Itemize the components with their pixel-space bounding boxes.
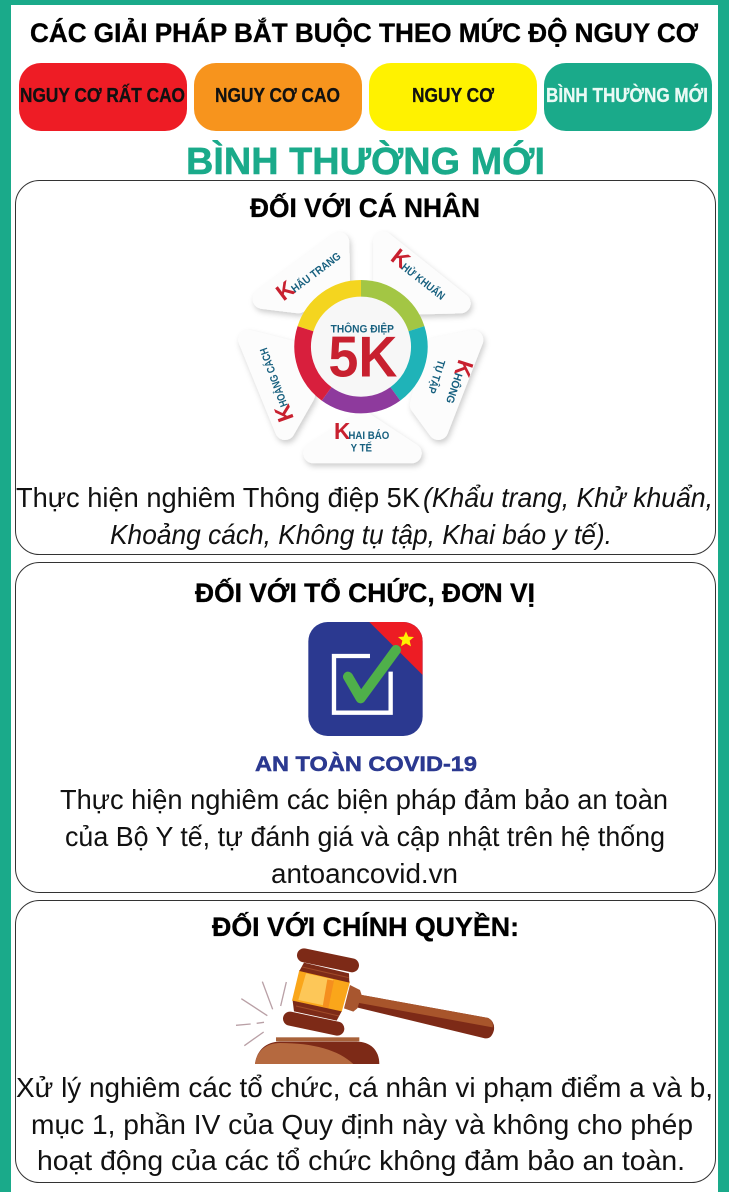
label: Khoảng cách: HOẢNG CÁCH	[257, 346, 291, 409]
text: 5K description: Khoảng cách, Không tụ tập, Khai báo y tế).	[110, 519, 612, 550]
heading: organizations: ĐỐI VỚI TỔ CHỨC, ĐƠN VỊ	[195, 576, 535, 608]
text: 5K description	[16, 482, 713, 550]
text: organizations description: Thực hiện nghiêm các biện pháp đảm bảo an toàn	[60, 784, 668, 815]
text: authorities description: hoạt động của các tổ chức không đảm bảo an toàn.	[37, 1145, 685, 1176]
risk level pills	[19, 63, 712, 131]
label: Không tụ tập: HÔNG	[443, 371, 465, 405]
panel: authorities	[16, 900, 716, 1182]
label: Khử khuẩn: HỬ KHUẨN	[399, 261, 448, 303]
label: Khẩu trang: K	[271, 275, 300, 306]
logo caption: AN TOÀN COVID-19	[255, 753, 477, 776]
text: organizations description: của Bộ Y tế, tự đánh giá và cập nhật trên hệ thống	[65, 821, 665, 852]
icon: An toàn COVID-19 app	[308, 622, 423, 736]
text: organizations description: antoancovid.vn	[271, 858, 458, 889]
pill: new normal	[544, 63, 712, 131]
text: organizations description	[60, 784, 668, 889]
label: Khử khuẩn	[386, 243, 454, 304]
text: 5K description: (Khẩu trang, Khử khuẩn,	[423, 482, 713, 513]
base	[255, 1042, 379, 1064]
head	[292, 970, 350, 1012]
panel: organizations	[16, 562, 716, 892]
pill: risk	[369, 63, 537, 131]
label: Khoảng cách: K	[268, 401, 299, 425]
text: authorities description: Xử lý nghiêm các tổ chức, cá nhân vi phạm điểm a và b,	[16, 1072, 713, 1103]
5K message diagram: 5K	[328, 326, 397, 390]
pill: very high risk	[19, 63, 187, 131]
icon: gavel	[236, 955, 494, 1064]
pill: risk: NGUY CƠ	[412, 85, 495, 107]
ring	[303, 288, 419, 405]
label: Khai báo y tế: Y TẾ	[351, 442, 372, 455]
text: authorities description: mục 1, phần IV của Quy định này và không cho phép	[31, 1109, 693, 1140]
text: 5K description: Thực hiện nghiêm Thông điệp 5K	[16, 482, 421, 513]
label: Khai báo y tế	[334, 418, 390, 455]
label: Khử khuẩn: K	[386, 243, 416, 274]
5K message diagram: THÔNG ĐIỆP	[331, 322, 394, 335]
label: Khẩu trang	[271, 241, 345, 306]
label: Không tụ tập	[425, 357, 479, 408]
panel: individuals	[16, 180, 716, 554]
pill: very high risk: NGUY CƠ RẤT CAO	[20, 84, 185, 107]
label: Khẩu trang: HẨU TRANG	[289, 250, 343, 295]
label: Khai báo y tế: K	[334, 418, 351, 444]
heading: individuals: ĐỐI VỚI CÁ NHÂN	[250, 191, 480, 223]
label: Không tụ tập: TỤ TẬP	[425, 358, 448, 395]
text: authorities description	[16, 1072, 713, 1176]
pill: high risk: NGUY CƠ CAO	[215, 85, 340, 107]
title: CÁC GIẢI PHÁP BẮT BUỘC THEO MỨC ĐỘ NGUY CƠ	[30, 16, 698, 48]
5K message diagram	[248, 241, 479, 455]
label: Không tụ tập: K	[449, 357, 479, 381]
heading: authorities: ĐỐI VỚI CHÍNH QUYỀN:	[212, 910, 519, 942]
current level heading: BÌNH THƯỜNG MỚI	[186, 139, 545, 183]
handle	[357, 994, 494, 1038]
label: Khoảng cách	[248, 345, 299, 425]
label: Khai báo y tế: HAI BÁO	[348, 429, 390, 442]
pill: high risk	[194, 63, 362, 131]
